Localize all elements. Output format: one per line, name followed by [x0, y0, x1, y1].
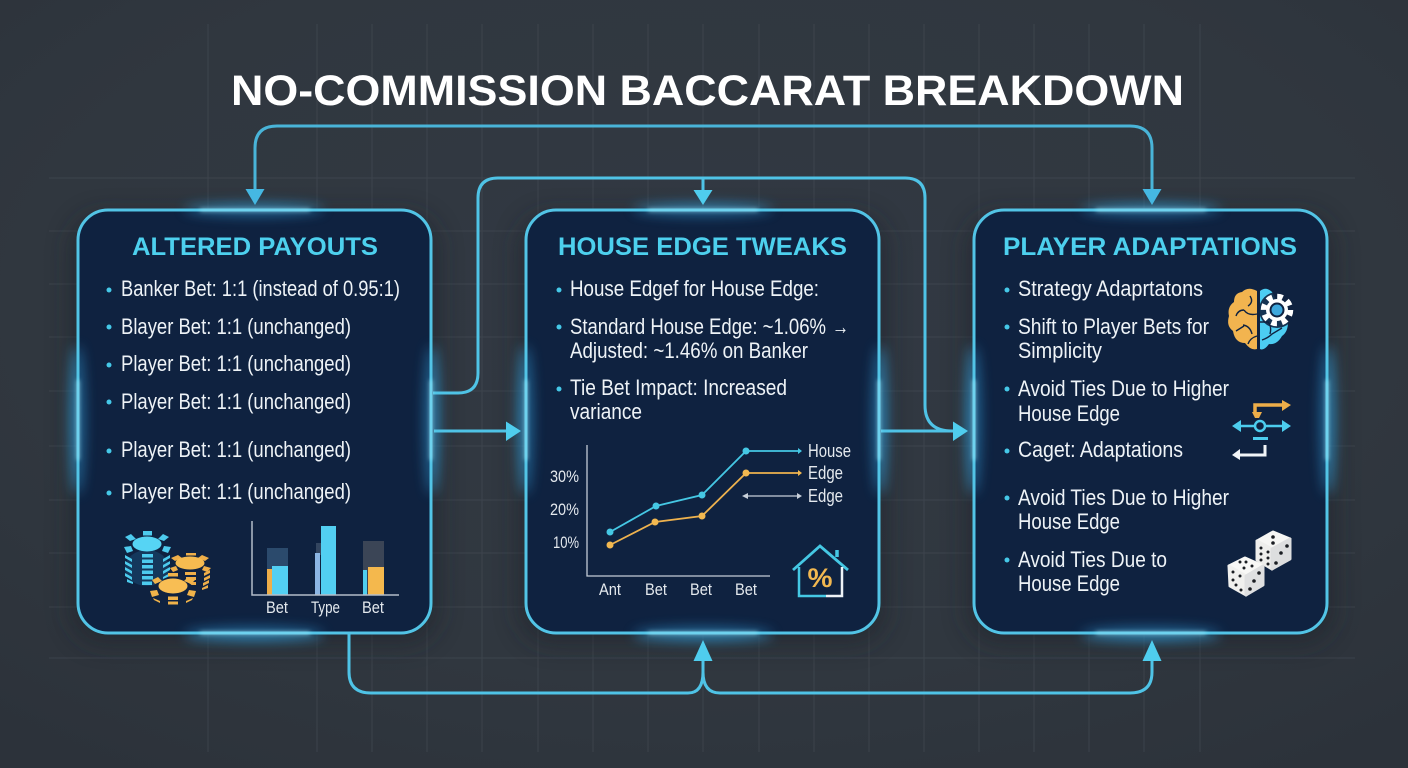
panel shadows — [70, 214, 1335, 644]
arrow: altered payouts to house edge tweaks — [434, 422, 521, 441]
bullet list: Avoid Ties Due to — [1018, 547, 1167, 572]
heading: ALTERED PAYOUTS — [132, 233, 378, 261]
line chart: Edge — [808, 486, 843, 506]
connector: altered payouts over the middle panel into player adaptations — [433, 178, 958, 431]
bullet list: House Edge — [1018, 571, 1120, 596]
bullet list — [556, 276, 849, 424]
line chart — [550, 441, 851, 599]
icon: dice — [1229, 532, 1290, 595]
bullet list: Blayer Bet: 1:1 (unchanged) — [121, 314, 351, 339]
bar chart: Bet — [362, 598, 384, 617]
heading: PLAYER ADAPTATIONS — [1003, 233, 1297, 261]
bar chart: Bet — [266, 598, 288, 617]
panel: house edge tweaks — [519, 202, 886, 641]
bullet list: → — [832, 314, 849, 339]
bullet list: Strategy Adaprtatons — [1018, 276, 1203, 301]
bullet list: Caget: Adaptations — [1018, 437, 1183, 462]
bullet list: Simplicity — [1018, 338, 1102, 363]
line chart: 20% — [550, 500, 579, 519]
line chart: 10% — [553, 533, 579, 552]
heading: HOUSE EDGE TWEAKS — [558, 233, 847, 261]
bullet list: House Edgef for House Edge: — [570, 276, 819, 301]
line chart: Bet — [735, 580, 757, 599]
bullet list: Avoid Ties Due to Higher — [1018, 376, 1229, 401]
icon: casino chips — [124, 531, 211, 605]
bar chart — [252, 521, 399, 617]
bullet list: variance — [570, 399, 642, 424]
bullet list: Tie Bet Impact: Increased — [570, 375, 787, 400]
panel: altered payouts — [71, 202, 438, 641]
icon: brain with gear — [1228, 289, 1295, 349]
bullet list: Avoid Ties Due to Higher — [1018, 485, 1229, 510]
panel: player adaptations — [967, 202, 1334, 641]
bullet list: Banker Bet: 1:1 (instead of 0.95:1) — [121, 276, 400, 301]
arrow: house edge tweaks to player adaptations — [881, 422, 968, 441]
bullet list: House Edge — [1018, 401, 1120, 426]
line chart: Bet — [645, 580, 667, 599]
bullet list: Standard House Edge: ~1.06% — [570, 314, 826, 339]
bullet list: Adjusted: ~1.46% on Banker — [570, 338, 808, 363]
bullet list — [106, 276, 400, 504]
icon: direction arrows — [1232, 400, 1291, 460]
bullet list: Shift to Player Bets for — [1018, 314, 1209, 339]
line chart: 30% — [550, 467, 579, 486]
bullet list: Player Bet: 1:1 (unchanged) — [121, 389, 351, 414]
connector: top loop to altered payouts and player adaptations — [246, 126, 1162, 205]
bullet list: House Edge — [1018, 509, 1120, 534]
title: NO-COMMISSION BACCARAT BREAKDOWN — [231, 68, 1184, 115]
bar chart: Type — [311, 598, 340, 617]
line chart: House — [808, 441, 851, 461]
line chart: Edge — [808, 463, 843, 483]
icon: house with percent — [793, 546, 848, 596]
bullet list: Player Bet: 1:1 (unchanged) — [121, 479, 351, 504]
icon: house with percent: % — [808, 563, 832, 593]
bullet list: Player Bet: 1:1 (unchanged) — [121, 437, 351, 462]
connector: bottom loop — [349, 634, 1162, 693]
outer panel glow — [70, 204, 1335, 641]
line chart: Bet — [690, 580, 712, 599]
bullet list: Player Bet: 1:1 (unchanged) — [121, 351, 351, 376]
bullet list — [1004, 276, 1229, 596]
line chart: Ant — [599, 580, 621, 599]
